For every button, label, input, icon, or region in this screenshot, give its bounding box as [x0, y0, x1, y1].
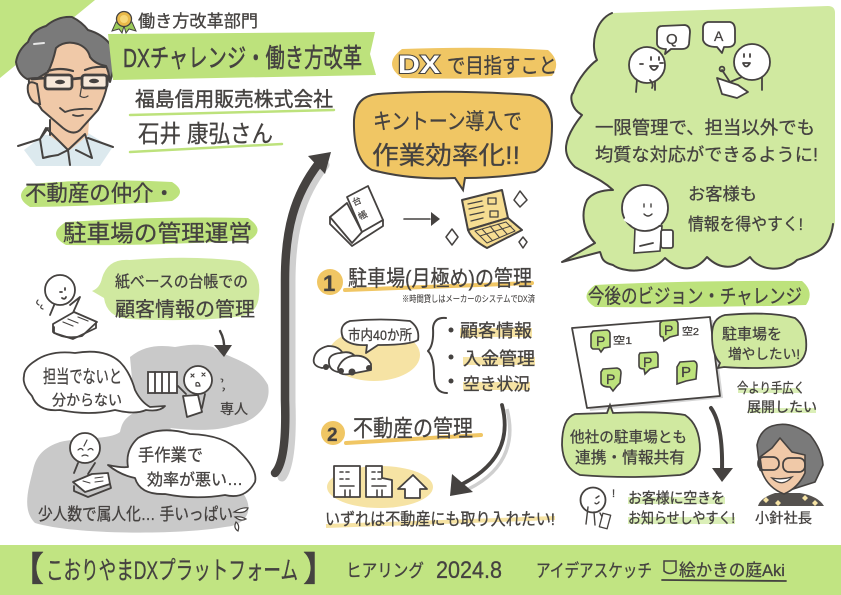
bubble: partner: 連携・情報共有 [575, 449, 685, 467]
text: get information: 情報を得やすく! [688, 215, 803, 234]
arrow: to laptop [404, 212, 440, 226]
caption: real estate future: いずれは不動産にも取り入れたい! [325, 510, 555, 529]
department label: 働き方改革部門 [138, 12, 258, 31]
caption: too few people: 少人数で属人化… 手いっぱい [38, 505, 233, 524]
icon: ledger book: 台 [350, 194, 363, 208]
caption: notify customers [628, 490, 735, 527]
bubble: manual work [108, 430, 255, 497]
section 1 heading: 駐車場(月極め)の管理 [348, 266, 532, 291]
section 1 heading [317, 266, 532, 296]
footer logo: 絵かきの庭Aki [679, 561, 785, 580]
marker P 5 [677, 361, 697, 384]
title banner [108, 32, 376, 80]
curved arrow down [450, 405, 510, 496]
caption: notify customers: お客様に空きを [628, 490, 725, 507]
text: permissions: 一限管理で、担当以外でも [595, 118, 815, 138]
text: customers: お客様も [688, 185, 757, 204]
bubble A: A [714, 28, 724, 44]
parking illustration [314, 320, 420, 381]
marker P 2 [660, 320, 678, 341]
marker P 3: P [643, 354, 652, 370]
label vacancy 2: 空2 [682, 326, 699, 338]
files and specialist [148, 366, 248, 417]
marker P 4 [601, 368, 621, 391]
person with phone [580, 488, 615, 529]
title banner: DXチャレンジ・働き方改革 [123, 43, 362, 73]
section 2 heading: 2 [327, 425, 338, 446]
icon: sweat drops [234, 508, 248, 531]
callout: kintone [354, 92, 552, 190]
badge icon [112, 12, 136, 33]
icon: laptop [462, 190, 522, 248]
heading: vision: 今後のビジョン・チャレンジ [588, 285, 802, 308]
note: ※時間貸しはメーカーのシステムでDX済 [402, 293, 535, 304]
portrait [16, 17, 115, 166]
background corner [0, 0, 95, 78]
buildings illustration [327, 466, 433, 508]
marker P 1: P [596, 333, 605, 349]
heading: business 1: 不動産の仲介・ [25, 181, 175, 206]
person with tablet [622, 185, 673, 253]
marker P 5: P [681, 364, 691, 381]
person Q [629, 47, 665, 92]
list: vacancy: 空き状況 [463, 375, 530, 394]
text: uniform response: 均質な対応ができるように! [595, 145, 818, 165]
icon: ledger book: 帳 [356, 208, 369, 222]
footer platform name: こおりやまDXプラットフォーム [46, 557, 298, 585]
bubble: partner: 他社の駐車場とも [570, 429, 687, 446]
bubble: not in charge [24, 352, 165, 413]
footer date: 2024.8 [436, 557, 502, 584]
files and specialist: 専人 [220, 401, 248, 417]
heading: DX goal: DX [398, 51, 440, 79]
person writing manually [70, 433, 111, 497]
marker P 4: P [606, 371, 615, 387]
label vacancy 1: 空1 [613, 335, 633, 347]
marker P 3 [639, 352, 658, 374]
callout: kintone: キントーン導入で [373, 109, 522, 134]
marker P 1 [591, 330, 610, 352]
down arrow [711, 408, 733, 482]
parking illustration: 市内40か所 [348, 327, 412, 343]
heading: DX goal: で目指すこと [447, 55, 557, 78]
caption: notify customers: お知らせしやすく! [628, 510, 735, 527]
footer title: 【 [10, 551, 44, 589]
bubble: manual work: 手作業で [138, 446, 203, 465]
bubble: not in charge: 分からない [52, 392, 122, 409]
bubble Q: Q [666, 31, 678, 48]
map card [572, 317, 723, 411]
bubble A [703, 22, 735, 53]
sparkles [446, 191, 527, 248]
bubble: paper ledger: 顧客情報の管理 [115, 298, 255, 321]
person name: 石井 康弘さん [138, 121, 273, 148]
marker P 2: P [664, 322, 673, 338]
down arrow [214, 331, 232, 357]
section 2 heading [321, 415, 481, 446]
footer idea sketch: アイデアスケッチ [536, 561, 652, 581]
bubble Q [657, 25, 690, 54]
footer title close: 】 [303, 551, 337, 589]
heading: business 2: 駐車場の管理運営 [63, 220, 252, 246]
bubble: partner [562, 405, 700, 477]
heading: DX goal [392, 48, 557, 79]
section 1 heading: 1 [323, 271, 335, 296]
company name: 福島信用販売株式会社 [135, 88, 333, 111]
caption: expand: 展開したい [747, 399, 817, 415]
caption: expand [737, 380, 817, 415]
person A with laptop [717, 44, 770, 98]
footer hearing: ヒアリング [346, 561, 424, 581]
list: payment: 入金管理 [463, 349, 535, 369]
president portrait [757, 424, 824, 506]
icon: ledger book [330, 186, 383, 246]
person with phone: ! [612, 488, 615, 500]
caption: expand: 今より手広く [737, 380, 805, 396]
bubble: more parking [712, 314, 806, 368]
thought cloud [562, 6, 835, 271]
bottom band [0, 545, 841, 595]
bubble: more parking: 駐車場を [722, 326, 782, 343]
bubble: more parking: 増やしたい! [728, 346, 800, 362]
president name: 小針社長 [755, 510, 812, 526]
callout: kintone: 作業効率化!! [372, 142, 520, 170]
section 2 heading: 不動産の管理 [353, 415, 473, 441]
person with ledger [37, 275, 97, 339]
bubble: not in charge: 担当でないと [43, 367, 122, 387]
bubble: paper ledger: 紙ベースの台帳での [115, 273, 248, 291]
gray problem area [27, 345, 269, 533]
bubble: paper ledger [92, 258, 259, 321]
big up arrow [275, 152, 331, 477]
bubble: manual work: 効率が悪い… [147, 471, 243, 489]
bracket [428, 318, 447, 393]
list: customer info: 顧客情報 [460, 321, 532, 341]
